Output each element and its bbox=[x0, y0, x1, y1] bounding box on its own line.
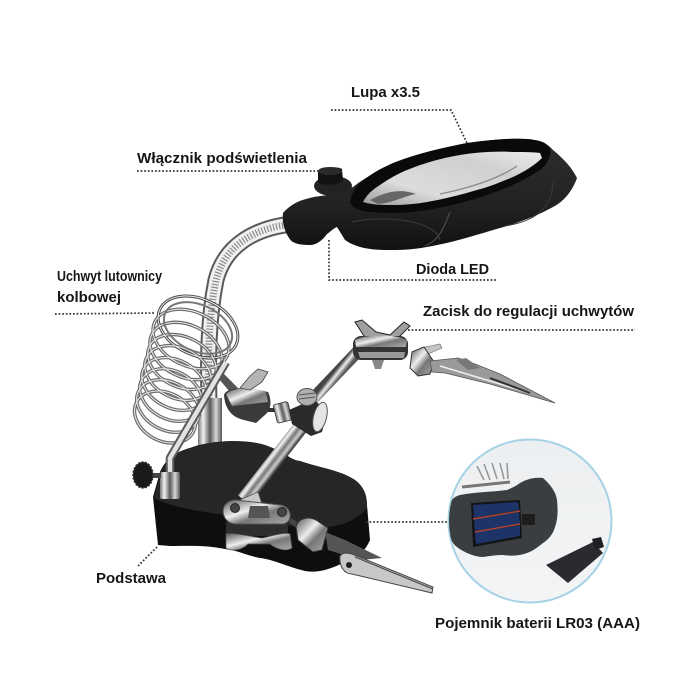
handle grip highlights bbox=[352, 219, 440, 240]
magnifier rim bbox=[350, 139, 551, 213]
magnifier housing bbox=[283, 139, 577, 250]
centre clamp on arm bbox=[289, 388, 330, 436]
label: base bbox=[96, 547, 167, 587]
pillar and gooseneck bbox=[198, 224, 292, 474]
label: soldering iron holder: kolbowej bbox=[57, 289, 121, 306]
spring detail bbox=[477, 463, 508, 480]
infographic: soldering helping hands with magnifier bbox=[55, 87, 640, 631]
upper wing-nut joint and alligator clip bbox=[353, 320, 555, 403]
label: base: Podstawa bbox=[96, 570, 167, 587]
device back body bbox=[448, 478, 558, 557]
label: illumination switch: Włącznik podświetlenia bbox=[137, 150, 308, 167]
spring holder rod and socket with knob bbox=[133, 362, 226, 499]
label: clamp for holder adjustment: Zacisk do regulacji uchwytów bbox=[423, 303, 634, 320]
battery holder with cells bbox=[471, 500, 522, 547]
left wing-nut clip joint bbox=[219, 369, 292, 423]
jointed arm bbox=[244, 348, 361, 500]
battery cover bbox=[546, 542, 603, 583]
label: magnifier bbox=[331, 84, 467, 143]
label: soldering iron holder bbox=[55, 268, 163, 314]
label: magnifier: Lupa x3.5 bbox=[351, 84, 420, 101]
magnifier handle and body bbox=[283, 139, 577, 250]
base bbox=[153, 441, 370, 572]
battery compartment inset bbox=[448, 440, 612, 602]
icon: illumination switch button bbox=[314, 167, 352, 196]
label: battery compartment: Pojemnik baterii LR03 (AAA) bbox=[435, 615, 640, 632]
lower clip joint and alligator clip bbox=[223, 492, 433, 593]
label: soldering iron holder: Uchwyt lutownicy bbox=[57, 268, 163, 285]
latch bbox=[522, 514, 535, 525]
magnifier lens bbox=[363, 152, 542, 205]
label: LED diode bbox=[329, 240, 496, 280]
label: LED diode: Dioda LED bbox=[416, 261, 489, 278]
soldering iron holder spring bbox=[125, 284, 248, 453]
